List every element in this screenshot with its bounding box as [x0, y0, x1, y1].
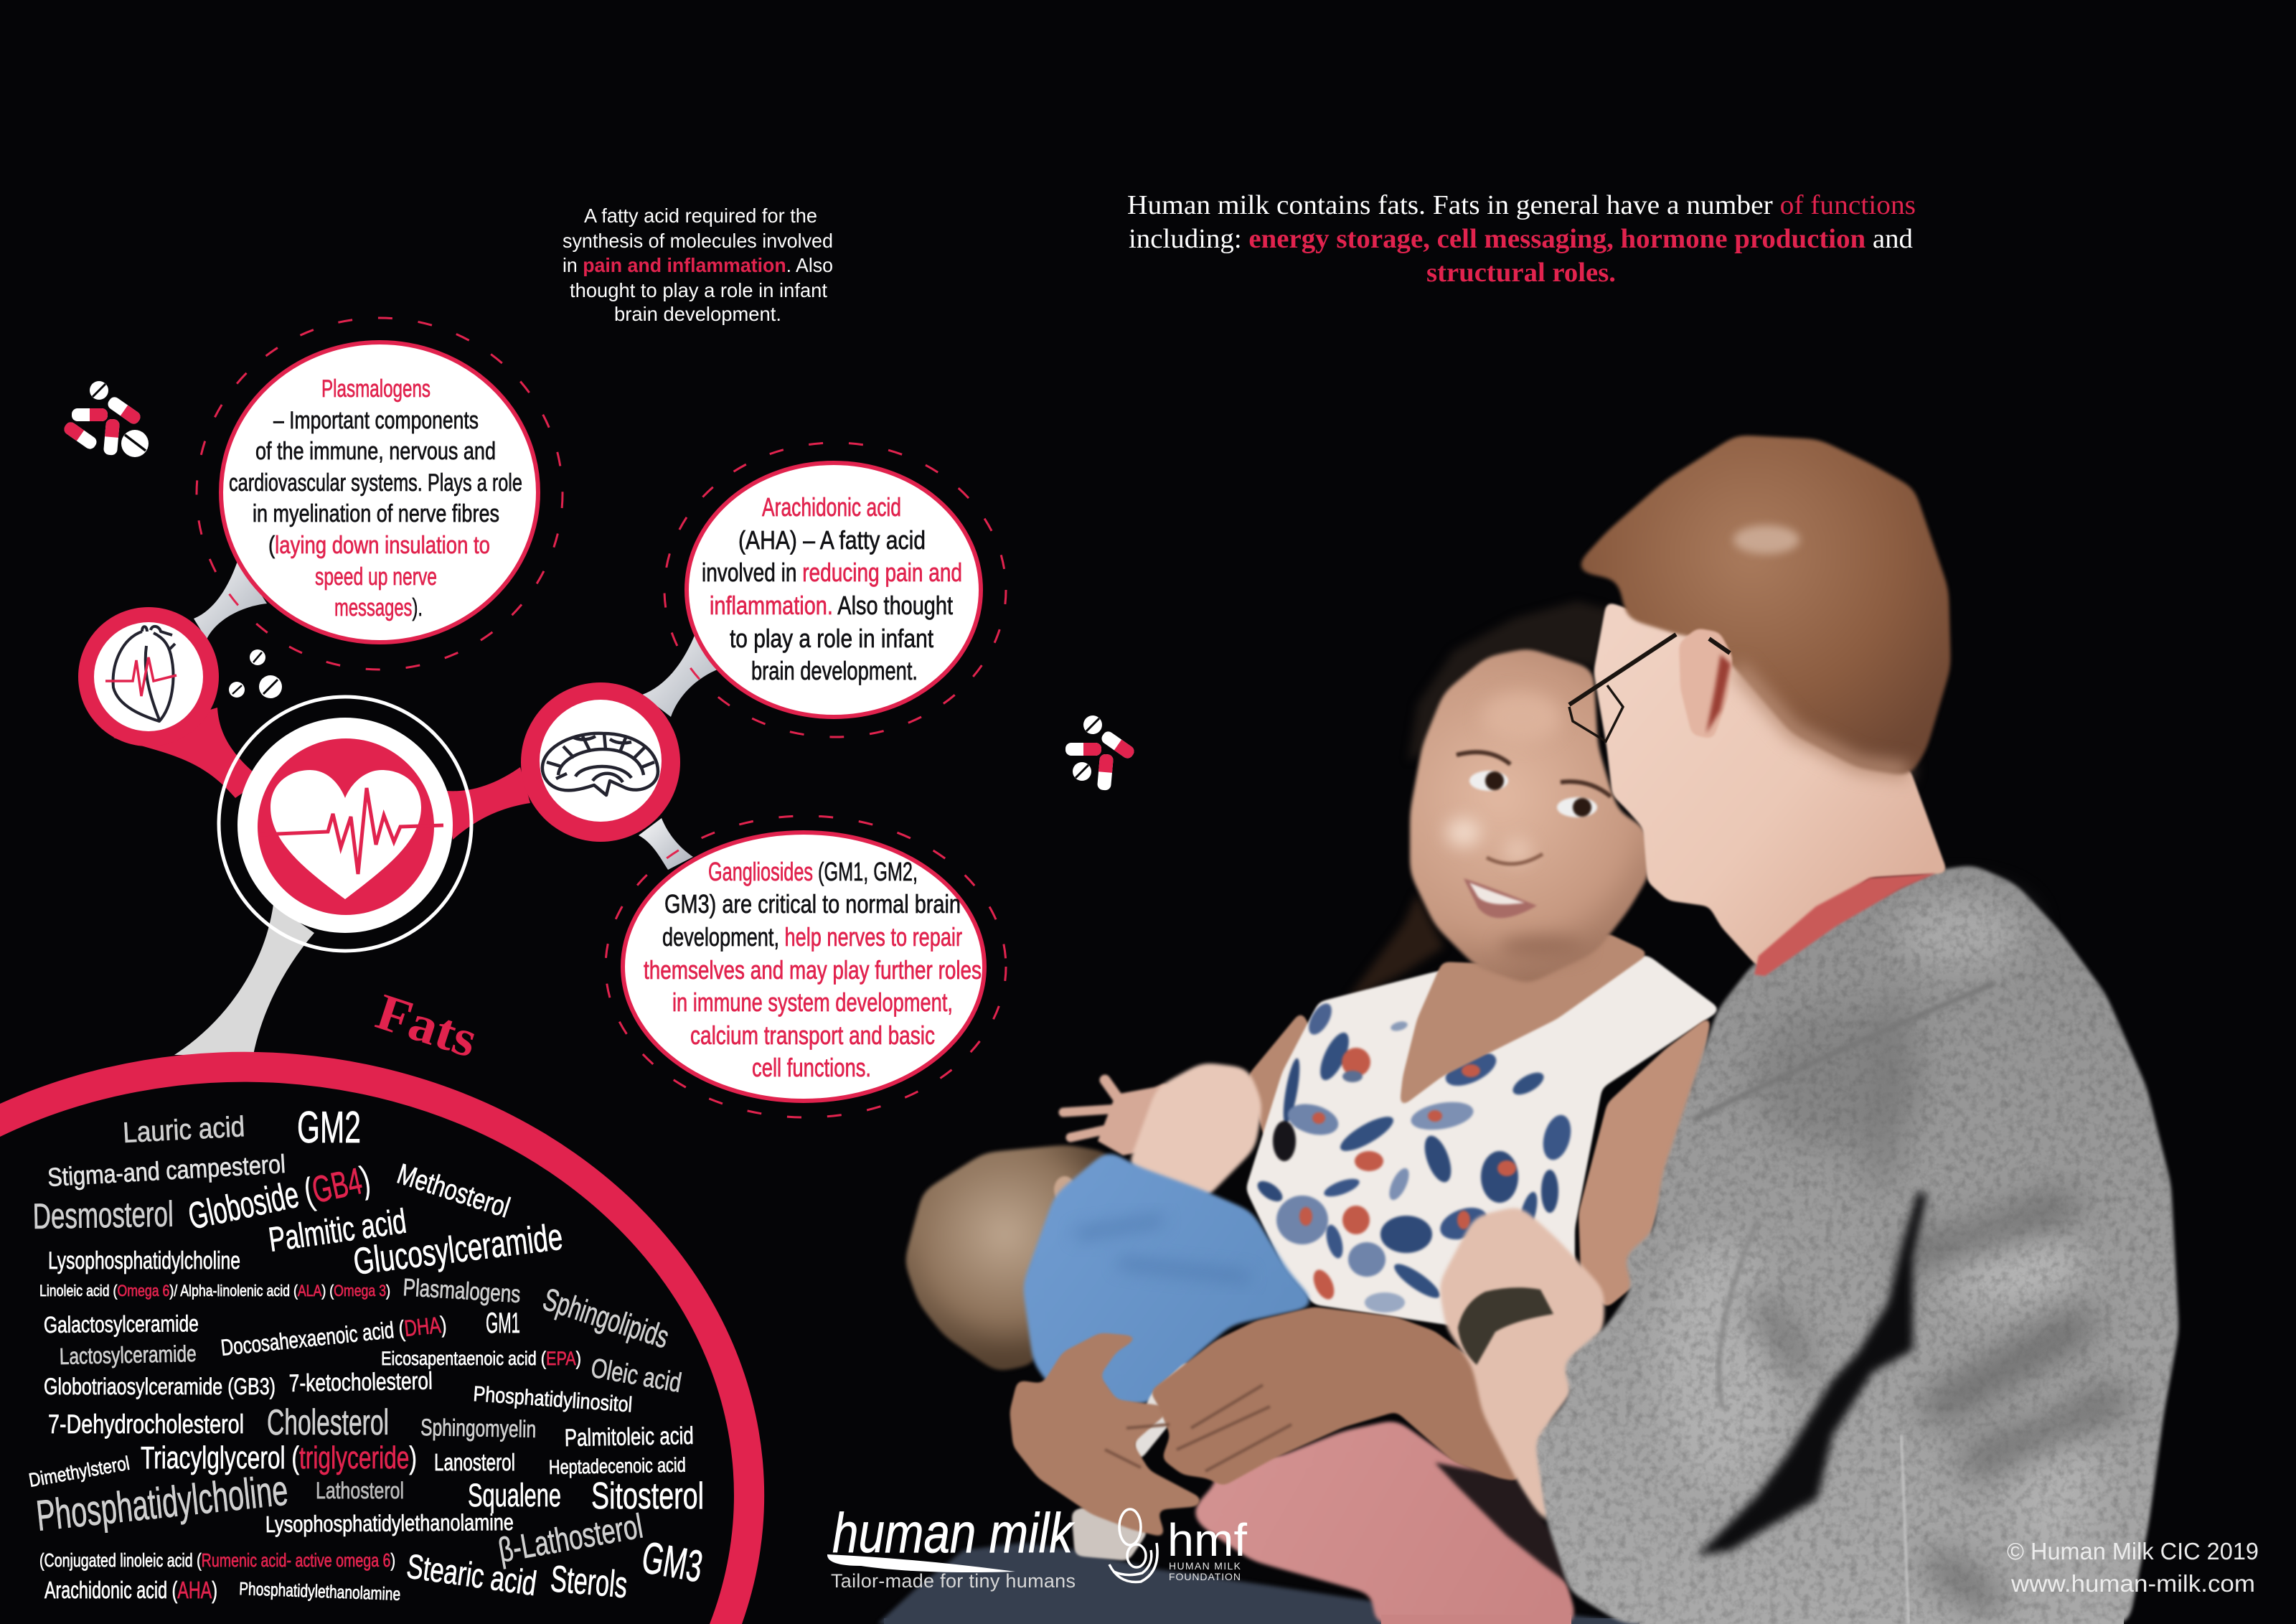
baby's hand — [1063, 1080, 1166, 1155]
word list: Phosphatidylethanolamine — [239, 1579, 401, 1605]
nappy — [1134, 1356, 1191, 1464]
word list: Sphingomyelin — [420, 1414, 536, 1442]
text: arachidonic acid: to play a role in infant — [730, 624, 933, 653]
panel: fats word cloud — [0, 1052, 764, 1624]
word list: Lysophosphatidylethanolamine — [265, 1509, 514, 1537]
woman's far arm — [1578, 1014, 1712, 1309]
logo: hmf — [1109, 1509, 1247, 1582]
arc: red ring — [0, 1052, 764, 1624]
word list: Triacylglycerol (triglyceride) — [141, 1440, 417, 1475]
text: plasmalogens — [229, 375, 522, 621]
panel: arachidonic acid — [664, 443, 1006, 737]
word list: Phosphatidylinositol — [473, 1382, 633, 1417]
text: fatty acid description: A fatty acid required for the — [584, 205, 817, 227]
circle: main heart node — [219, 697, 471, 951]
man's hair — [1571, 435, 1951, 776]
text: gangliosides: themselves and may play further roles — [644, 955, 982, 985]
sweater lighter areas — [1657, 897, 2095, 1557]
white undershirt — [1071, 1506, 1149, 1561]
icon: small tablets — [229, 649, 282, 698]
man's sweater — [1535, 865, 2179, 1624]
text: gangliosides: GM3) are critical to normal brain — [664, 889, 961, 919]
word list: Sphingolipids — [539, 1282, 673, 1355]
man's neck and face — [1594, 601, 1948, 968]
text: plasmalogens: (laying down insulation to — [268, 532, 490, 559]
man's collar — [1754, 873, 1936, 976]
text: arachidonic acid: involved in reducing pain and — [702, 558, 962, 587]
word list: β-Lathosterol — [496, 1507, 646, 1570]
circle: heart node — [78, 607, 219, 746]
woman's face — [1410, 648, 1650, 985]
baby's arm — [1126, 1062, 1263, 1202]
text: arachidonic acid: Arachidonic acid — [762, 492, 901, 522]
sweater fold shadows — [1762, 1005, 2114, 1600]
text: arachidonic acid: (AHA) – A fatty acid — [738, 525, 926, 555]
word list: Dimethylsterol — [27, 1452, 131, 1491]
icon: heartbeat line — [260, 788, 443, 874]
connectors between circles — [113, 559, 719, 1055]
shirt folds — [1076, 1220, 1248, 1277]
text: fatty acid description — [563, 205, 833, 325]
copyright text — [2007, 1538, 2259, 1597]
word list: Glucosylceramide — [351, 1216, 565, 1283]
word list: Stigma-and campesterol — [47, 1149, 286, 1192]
word list: 7-ketocholesterol — [288, 1368, 433, 1397]
connector: brain to gangliosides — [639, 818, 693, 870]
blouse hem — [1435, 1463, 1571, 1586]
intro text: functions of fats: Human milk contains fats. Fats in general have a number of functions — [1127, 190, 1916, 220]
woman's features — [1457, 752, 1611, 918]
logo: hmf: FOUNDATION — [1169, 1571, 1241, 1582]
text: arachidonic acid: brain development. — [751, 656, 918, 685]
word list: Heptadecenoic acid — [549, 1454, 686, 1478]
word list: Lysophosphatidylcholine — [48, 1247, 240, 1275]
man's inner ear — [1706, 654, 1731, 733]
word list: Phosphatidylcholine — [34, 1466, 290, 1540]
icon: pills centre right — [1065, 715, 1137, 791]
text: fatty acid description: in pain and inflammation. Also — [563, 254, 833, 276]
intro text: functions of fats: structural roles. — [1426, 258, 1616, 288]
word list: Lauric acid — [122, 1111, 245, 1149]
blouse flowers — [1254, 1000, 1576, 1313]
sweater grain — [1535, 865, 2179, 1624]
connector: main to fats arc — [174, 904, 314, 1055]
mother's lower hand — [1010, 1333, 1203, 1538]
intro text: functions of fats — [1127, 190, 1916, 288]
word list: Methosterol — [393, 1158, 514, 1224]
logo: human milk: Tailor-made for tiny humans — [831, 1570, 1076, 1592]
word list: Eicosapentaenoic acid (EPA) — [381, 1348, 581, 1369]
connector: heart to main — [113, 708, 262, 798]
woman's hair — [1408, 601, 1611, 761]
arm gap shadow — [1697, 1193, 1927, 1556]
pink leggings — [1191, 1407, 1578, 1624]
word list: 7-Dehydrocholesterol — [48, 1409, 244, 1439]
text: gangliosides: in immune system development, — [672, 987, 953, 1017]
text: plasmalogens: in myelination of nerve fibres — [253, 500, 499, 527]
panel: plasmalogens — [197, 318, 563, 670]
text: fatty acid description: brain development. — [614, 303, 781, 325]
word list: Lanosterol — [434, 1449, 515, 1475]
icon: anatomical heart — [113, 626, 175, 721]
word list: Globoside (GB4) — [184, 1159, 374, 1238]
text: plasmalogens: messages). — [334, 594, 423, 621]
word list: Stearic acid — [404, 1547, 539, 1603]
word list: Desmosterol — [32, 1194, 174, 1236]
word list: Lathosterol — [316, 1478, 404, 1503]
word list: Sitosterol — [591, 1475, 704, 1517]
word list: GM1 — [486, 1308, 520, 1339]
mother's upper hand and forearm — [1149, 1307, 1521, 1486]
word list: GM2 — [297, 1103, 361, 1153]
woman's ponytail — [1347, 893, 1444, 999]
connector: main to brain — [446, 767, 530, 840]
man's ear — [1679, 628, 1733, 739]
text: plasmalogens: cardiovascular systems. Plays a role — [229, 469, 522, 497]
photo: family breastfeeding — [878, 435, 2179, 1624]
word list: Cholesterol — [267, 1402, 389, 1442]
word list: Plasmalogens — [403, 1274, 522, 1308]
intro text: functions of fats: including: energy storage, cell messaging, hormone production and — [1129, 224, 1913, 254]
icon: brain — [542, 733, 658, 795]
panel: gangliosides — [606, 816, 1006, 1117]
word list: Docosahexaenoic acid (DHA) — [220, 1311, 448, 1361]
heading: Fats: Fats — [370, 982, 484, 1069]
text: plasmalogens: Plasmalogens — [321, 375, 430, 403]
word list: Palmitic acid — [266, 1203, 409, 1259]
text: gangliosides: Gangliosides (GM1, GM2, — [708, 857, 918, 886]
text: plasmalogens: – Important components — [273, 407, 479, 434]
text: fatty acid description: thought to play a role in infant — [570, 279, 827, 301]
baby's ear — [1054, 1176, 1076, 1203]
circle: brain node — [521, 682, 680, 842]
hair fade on neck — [1736, 667, 1909, 771]
word list: GM3 — [639, 1533, 706, 1592]
word list: Arachidonic acid (AHA) — [44, 1577, 217, 1603]
word list: Squalene — [468, 1477, 561, 1513]
text: gangliosides — [644, 857, 982, 1082]
sweater seams — [1693, 983, 1995, 1120]
word list: Sterols — [549, 1558, 629, 1606]
word list: Linoleic acid (Omega 6)/ Alpha-linolenic acid (ALA) (Omega 3) — [39, 1282, 390, 1300]
brand logos — [827, 1501, 1247, 1592]
baby's blue shirt — [1022, 1150, 1319, 1407]
text: plasmalogens: speed up nerve — [315, 563, 437, 591]
connector: brain to arachidonic — [642, 630, 719, 717]
woman's facial highlights — [1446, 693, 1586, 959]
word list: (Conjugated linoleic acid (Rumenic acid- active omega 6) — [39, 1549, 395, 1571]
word list: Galactosylceramide — [44, 1310, 199, 1338]
logo: human milk — [827, 1501, 1076, 1592]
man's hand and forearm — [1439, 1206, 1604, 1543]
text: arachidonic acid — [702, 492, 962, 685]
text: gangliosides: cell functions. — [752, 1053, 871, 1082]
woman's upper arm — [1247, 1010, 1313, 1141]
blouse — [1246, 955, 1721, 1329]
word list — [27, 1103, 706, 1606]
logo: human milk: human milk — [832, 1501, 1075, 1564]
text: arachidonic acid: inflammation. Also thought — [710, 591, 953, 620]
hair highlight — [1733, 525, 1799, 554]
text: gangliosides: calcium transport and basic — [690, 1020, 935, 1050]
word list: Lactosylceramide — [59, 1341, 197, 1369]
icon: heart — [270, 770, 421, 899]
woman's neck and chest — [1399, 933, 1650, 1109]
logo: hmf: HUMAN MILK — [1169, 1560, 1241, 1572]
glasses — [1569, 634, 1730, 741]
word list: Oleic acid — [588, 1353, 684, 1399]
icon: pills top left — [62, 381, 149, 457]
text: fatty acid description: synthesis of molecules involved — [563, 230, 833, 252]
text: plasmalogens: of the immune, nervous and — [255, 438, 496, 465]
logo: hmf: hmf — [1167, 1514, 1247, 1566]
word list: Globotriaosylceramide (GB3) — [44, 1374, 276, 1399]
watch — [1458, 1287, 1553, 1365]
word list: Palmitoleic acid — [564, 1422, 694, 1452]
finger shadows — [1105, 1385, 1292, 1471]
connector: heart to plasmalogens — [194, 559, 267, 639]
icon: heartbeat line — [105, 657, 177, 696]
baby's head — [904, 1145, 1119, 1372]
jeans — [878, 1543, 1650, 1624]
copyright text: www.human-milk.com — [2010, 1570, 2255, 1597]
copyright text: © Human Milk CIC 2019 — [2007, 1538, 2259, 1564]
text: gangliosides: development, help nerves to repair — [662, 922, 962, 952]
